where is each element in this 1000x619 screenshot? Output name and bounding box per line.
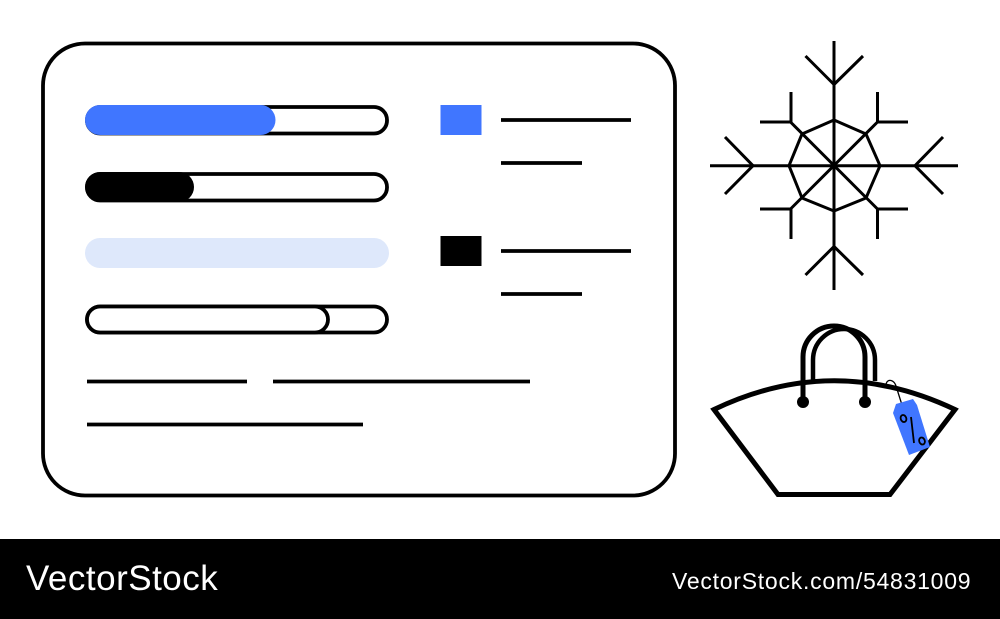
footer bar — [0, 539, 1000, 619]
footer logo text: VectorStock — [26, 559, 218, 598]
legend text lines: black — [501, 251, 631, 294]
progress bar: pale blue — [85, 238, 389, 268]
panel: dashboard card — [43, 44, 675, 496]
progress bar: blue — [85, 105, 387, 135]
tag string — [886, 380, 902, 405]
icon: shopping bag with price tag — [714, 326, 955, 494]
bag body — [714, 381, 955, 494]
legend swatch: black — [440, 236, 482, 266]
footer URL text: VectorStock.com/54831009 — [672, 568, 971, 594]
caption text lines — [87, 382, 530, 424]
legend text lines: blue — [501, 120, 631, 163]
bag back handle — [813, 329, 875, 381]
percent symbol — [900, 414, 926, 445]
legend swatch: blue — [440, 105, 482, 135]
icon: snowflake — [710, 41, 958, 290]
progress bar: black — [85, 172, 387, 202]
handle rivets — [797, 396, 871, 408]
price tag — [893, 399, 930, 455]
bag front handle — [803, 326, 865, 402]
progress bar: outlined — [87, 306, 387, 332]
